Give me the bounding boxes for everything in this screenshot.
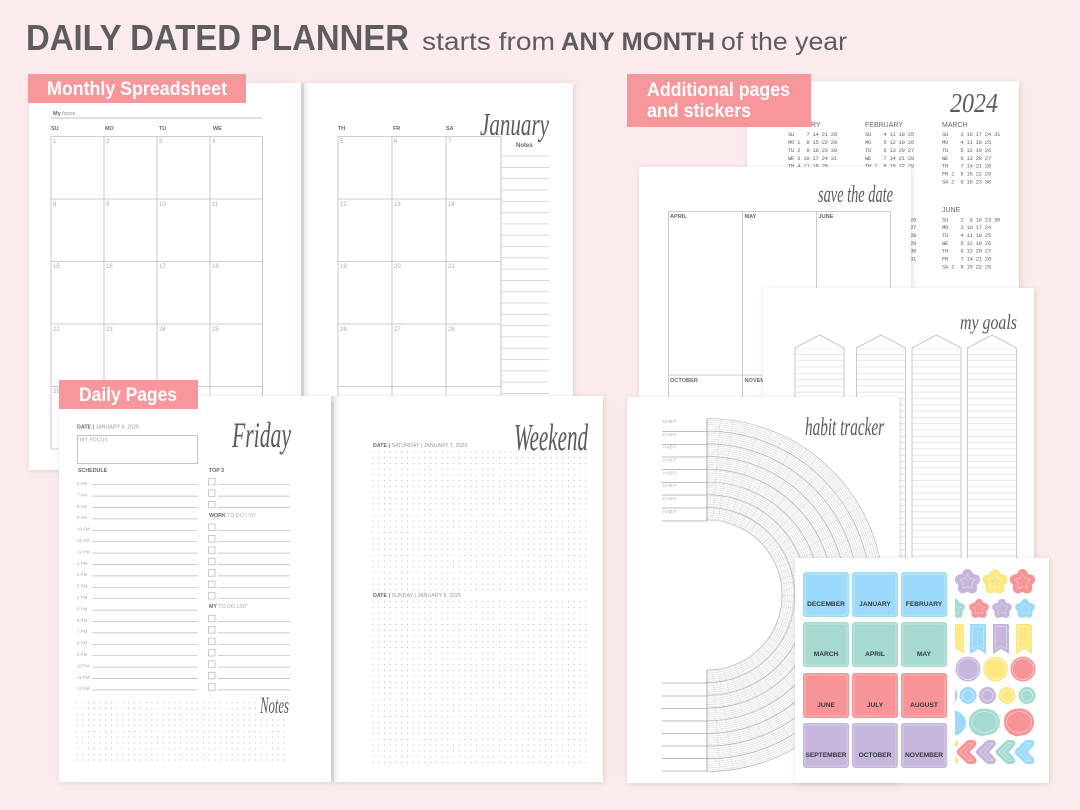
month: march: FR 1 8 15 22 29 [942, 170, 991, 178]
habit labels: HABIT [663, 432, 677, 437]
month: march: TU 5 12 19 26 [942, 147, 991, 154]
date numbers right: 5 [340, 139, 344, 145]
script heading: 2024: 2024 [950, 88, 998, 118]
to-do lists: TOP 3 [209, 468, 224, 474]
month columns: NOVEMBER [744, 378, 777, 384]
month columns: MAY [744, 214, 757, 220]
sticker: february [901, 572, 947, 617]
sticker: november: NOVEMBER [905, 752, 943, 759]
date numbers left: 9 [106, 202, 110, 208]
sticker: december [803, 572, 849, 617]
month: june: MO 3 10 17 24 [942, 224, 992, 231]
habit rows [662, 432, 707, 771]
date numbers right [340, 139, 455, 333]
month: january: MO 1 8 15 22 29 [788, 139, 837, 146]
script heading: Notes [257, 693, 291, 718]
title: DAILY DATED PLANNER [26, 17, 409, 58]
date numbers right: 28 [448, 327, 455, 333]
date numbers left: 10 [159, 202, 166, 208]
sticker: august: AUGUST [910, 702, 938, 709]
panel: 2024 calendar page [747, 81, 1019, 296]
weekday headers left: SU [51, 126, 59, 132]
sticker: august [901, 673, 947, 718]
schedule: 7 PM [77, 629, 88, 634]
month: february: WE 7 14 21 28 [865, 155, 914, 162]
date numbers right: 13 [394, 202, 401, 208]
weekday headers left: TU [159, 126, 166, 132]
date numbers right: 12 [340, 202, 347, 208]
schedule: 12 AM [77, 686, 90, 691]
date line: DATE | JANUARY 6, 2025 [77, 424, 139, 430]
month: may column end: 28 [910, 232, 916, 239]
label: additional pages and stickers [627, 74, 811, 127]
script heading: Weekend: Weekend [514, 417, 589, 459]
date numbers right: 27 [394, 327, 401, 333]
schedule: 7 AM [77, 492, 87, 497]
schedule: 3 PM [77, 584, 88, 589]
notes dot grid [76, 702, 285, 761]
label: additional pages and stickers: Additional pages [647, 80, 790, 101]
month columns [668, 212, 890, 400]
habit labels: HABIT [663, 496, 677, 501]
schedule: 11 AM [77, 538, 89, 543]
date numbers left: 22 [53, 327, 60, 333]
panel: monthly spreadsheet right page [301, 83, 573, 403]
panel: my goals page [763, 288, 1034, 578]
icon: large flower stars [960, 574, 1030, 588]
to-do lists: MY TO DO LIST [209, 604, 248, 610]
schedule: 6 AM [77, 481, 87, 486]
month: february: TH 1 8 15 22 29 [865, 162, 914, 170]
month columns: OCTOBER [670, 378, 698, 384]
script heading: January: January [480, 106, 550, 142]
month: march: TH 7 14 21 28 [942, 162, 991, 170]
habit labels: HABIT [663, 470, 677, 476]
month: february: TU 6 13 20 27 [865, 147, 914, 154]
saturday date: DATE | SATURDAY | JANUARY 7, 2025 [373, 443, 467, 449]
sticker: april: APRIL [865, 651, 885, 658]
schedule: 10 PM [77, 663, 90, 668]
notes lines [501, 143, 549, 400]
focus box: MY FOCUS [80, 438, 108, 444]
panel: sticker sheet [795, 558, 1049, 783]
title: starts from [422, 28, 555, 56]
habit labels: HABIT [663, 483, 677, 488]
sticker: october [852, 723, 898, 768]
to-do lists: WORK TO DO LIST [209, 513, 257, 519]
sticker: march [803, 622, 849, 667]
sticker: september [803, 723, 849, 768]
month: february: SU 4 11 18 25 [865, 131, 914, 138]
schedule: 4 PM [77, 595, 88, 600]
sticker: november [901, 723, 947, 768]
label: monthly spreadsheet: Monthly Spreadsheet [47, 78, 227, 100]
date numbers left: 3 [159, 139, 163, 145]
month stickers [803, 572, 947, 768]
schedule: 8 PM [77, 641, 88, 646]
title: of the year [721, 28, 847, 56]
icon: chevrons [942, 744, 1031, 760]
month: may column end: 27 [910, 224, 916, 231]
icon: speech bubbles [955, 708, 1034, 736]
panel: monthly spreadsheet left page [29, 83, 301, 470]
date numbers left: 1 [53, 139, 57, 145]
radial habit chart [707, 418, 884, 772]
date numbers left: 25 [212, 327, 219, 333]
weekday headers right: SA [446, 126, 454, 132]
month: march: WE 6 13 20 27 [942, 155, 991, 162]
weekday headers right [338, 126, 454, 132]
label: daily pages [59, 380, 198, 409]
script heading: Notes: Notes [259, 693, 289, 718]
sticker: july [852, 673, 898, 718]
schedule: 12 PM [77, 549, 90, 554]
schedule: 9 AM [77, 515, 87, 520]
schedule: 2 PM [77, 572, 88, 577]
weekday headers left [51, 126, 222, 132]
month: february: MO 5 12 19 26 [865, 139, 914, 146]
date numbers right: 19 [340, 264, 347, 270]
script heading: Weekend [512, 417, 590, 459]
sticker: june [803, 673, 849, 718]
schedule: 1 PM [77, 561, 88, 566]
month columns: JUNE [818, 214, 834, 220]
habit labels: HABIT [663, 458, 677, 462]
schedule: 8 AM [77, 504, 87, 509]
icon: small circles [955, 687, 1036, 704]
script heading: habit tracker: habit tracker [805, 414, 884, 441]
month: january: WE 3 10 17 24 31 [788, 155, 838, 162]
date numbers right: 14 [448, 202, 455, 208]
script heading: save the date: save the date [818, 182, 893, 208]
month: march: MARCH [942, 122, 968, 129]
icon: small flower stars [949, 603, 1031, 614]
month: january: JANUARY [788, 122, 821, 129]
weekday headers left: MO [105, 126, 114, 132]
month: january: TH 4 11 18 25 [788, 162, 828, 170]
label: monthly spreadsheet [28, 74, 246, 103]
calendar grid right [338, 136, 501, 403]
date numbers left: 8 [53, 202, 57, 208]
sticker: december: DECEMBER [807, 601, 845, 608]
date numbers right: 7 [448, 139, 452, 145]
date numbers right: 26 [340, 327, 347, 333]
month: january: TU 2 9 16 23 30 [788, 147, 838, 154]
month: may column end: 29 [910, 240, 916, 247]
date numbers left: 15 [53, 264, 60, 270]
weekday headers left: WE [213, 126, 222, 132]
month: june: WE 5 12 19 26 [942, 240, 991, 247]
script heading: Friday: Friday [231, 415, 291, 455]
title [26, 17, 847, 58]
schedule: SCHEDULE [78, 468, 108, 474]
month: january: SU 7 14 21 28 [788, 131, 837, 138]
sunday dot grid [372, 600, 589, 766]
month: june: TU 4 11 18 25 [942, 232, 991, 239]
month: january [788, 122, 838, 170]
schedule: 5 PM [77, 606, 88, 611]
date numbers left: 4 [212, 139, 216, 145]
month: june [942, 207, 1001, 270]
sticker: july: JULY [867, 702, 884, 709]
schedule: 9 PM [77, 652, 88, 657]
month: june: SA 1 8 15 22 29 [942, 264, 991, 270]
schedule: 6 PM [77, 618, 88, 623]
icon: large circles [956, 656, 1036, 682]
date numbers right: 20 [394, 264, 401, 270]
date numbers left: 2 [106, 139, 110, 145]
month: may column end: 30 [910, 248, 917, 254]
panel: daily pages left page [59, 396, 331, 782]
label: additional pages and stickers: and stickers [647, 101, 751, 122]
calendar grid left [51, 136, 262, 449]
month: february: FEBRUARY [865, 122, 903, 129]
date numbers left: 29 [53, 389, 60, 395]
date numbers right: 21 [448, 264, 455, 270]
month: march: SU 3 10 17 24 31 [942, 131, 1001, 138]
focus line: My focus [53, 111, 76, 117]
panel: daily pages right page [331, 396, 603, 782]
month: june: FR 7 14 21 28 [942, 256, 991, 262]
panel: save the date page [639, 167, 911, 402]
sticker: january [852, 572, 898, 617]
weekday headers right: TH [338, 126, 345, 132]
month: june: SU 2 9 16 23 30 [942, 216, 1001, 224]
month: june: JUNE [942, 207, 961, 214]
sticker: march: MARCH [814, 651, 839, 658]
sticker: april [852, 622, 898, 667]
label: daily pages: Daily Pages [79, 384, 177, 406]
habit labels: HABIT [663, 444, 677, 450]
month: february [865, 122, 914, 170]
date numbers left: 16 [106, 264, 113, 270]
month: may column end: 31 [910, 256, 917, 262]
habit labels: HABIT [663, 419, 677, 424]
title: ANY MONTH [561, 28, 715, 56]
month columns: APRIL [670, 214, 687, 220]
date numbers left: 11 [212, 202, 219, 208]
habit labels: HABIT [663, 509, 677, 514]
sticker: february: FEBRUARY [906, 601, 943, 608]
date numbers left: 24 [159, 327, 166, 333]
date numbers left: 23 [106, 327, 113, 333]
schedule: 11 PM [77, 675, 90, 680]
sticker: may: MAY [917, 651, 932, 658]
month: june: TH 6 13 20 27 [942, 248, 991, 254]
date numbers left: 18 [212, 264, 219, 270]
month: may column end: 26 [910, 216, 916, 224]
decorative stickers [955, 569, 1036, 764]
schedule [77, 468, 198, 691]
habit labels [663, 419, 677, 514]
weekday headers right: FR [393, 126, 400, 132]
script heading: my goals: my goals [960, 310, 1017, 334]
sticker: september: SEPTEMBER [805, 752, 847, 759]
date numbers right: 6 [394, 139, 398, 145]
sticker: june: JUNE [817, 702, 835, 709]
month: march [942, 122, 1001, 186]
panel: habit tracker page [627, 397, 899, 783]
month: march: MO 4 11 18 25 [942, 139, 991, 146]
focus box [78, 436, 198, 464]
notes lines: Notes [516, 143, 533, 149]
month: may column end [910, 216, 917, 262]
sticker: october: OCTOBER [859, 752, 892, 759]
month: march: SA 2 9 16 23 30 [942, 178, 992, 186]
schedule: 10 AM [77, 527, 90, 532]
saturday dot grid [372, 451, 589, 591]
to-do lists [208, 468, 290, 690]
sticker: may [901, 622, 947, 667]
sunday date: DATE | SUNDAY | JANUARY 8, 2025 [373, 593, 461, 599]
sticker: january: JANUARY [859, 601, 891, 608]
icon: bookmarks [948, 624, 1032, 654]
date numbers left [53, 139, 219, 395]
goal columns [795, 335, 1016, 563]
date numbers left: 17 [159, 264, 166, 270]
